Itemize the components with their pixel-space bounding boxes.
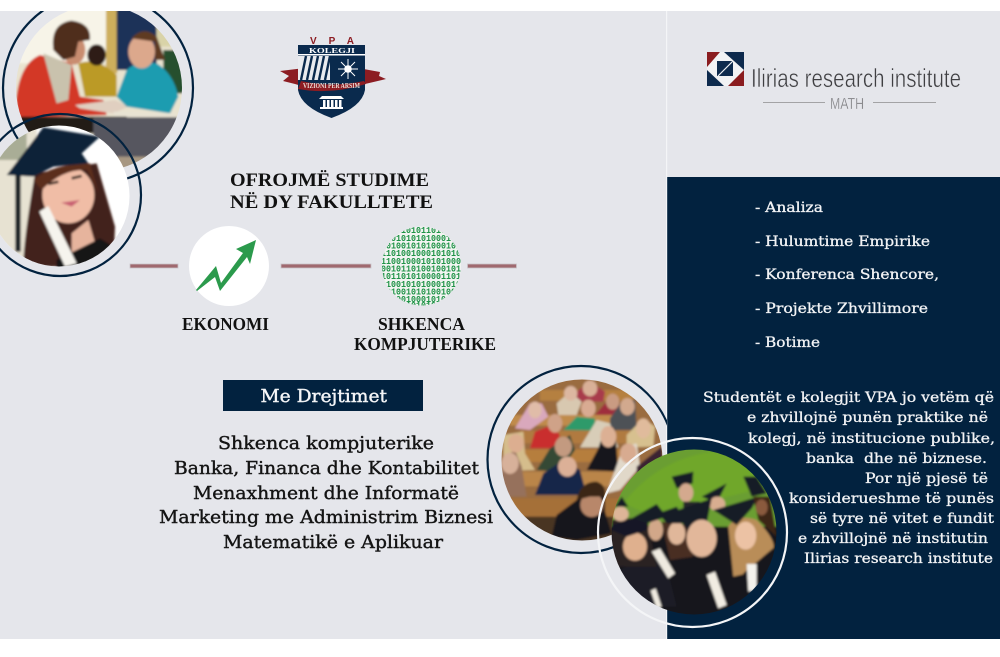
label: Ekonomi: EKONOMI	[182, 314, 269, 334]
title: NË DY FAKULLTETE	[230, 192, 433, 213]
icon: binary globe: 0010110100100101	[381, 264, 461, 274]
connector lines	[130, 264, 516, 268]
logo: Ilirias research institute	[707, 52, 961, 113]
title	[230, 170, 433, 213]
icon: binary globe: 1100101010001010	[381, 279, 461, 290]
paragraph about students: konsiderueshme të punës	[789, 491, 994, 507]
icon: binary globe	[381, 225, 461, 311]
photo: graduates group	[598, 438, 787, 627]
paragraph about students: kolegj, në institucione publike,	[748, 431, 995, 447]
photo: students at a table	[3, 0, 193, 183]
icon: binary globe: 0010010101001001	[381, 286, 461, 298]
list of study directions: Marketing me Administrim Biznesi	[159, 507, 493, 528]
list of activities: - Botime	[755, 335, 820, 351]
paragraph about students: e zhvillojnë në institutin	[798, 531, 988, 547]
label: Shkenca Kompjuterike: SHKENCA	[378, 314, 465, 334]
paragraph about students: Por një pjesë të	[865, 471, 988, 487]
icon: rising arrow	[189, 226, 269, 306]
logo: VPA Kolegji shield: V P A	[310, 36, 354, 47]
list of study directions: Shkenca kompjuterike	[218, 433, 434, 454]
paragraph about students: Studentët e kolegjit VPA jo vetëm që	[703, 390, 994, 406]
icon: binary globe: 1010010001010101	[381, 294, 461, 305]
label: Shkenca Kompjuterike	[354, 314, 496, 354]
list of study directions: Menaxhment dhe Informatë	[193, 483, 459, 504]
icon: diamond square mark	[707, 52, 744, 86]
logo: Ilirias research institute: MATH	[830, 96, 864, 113]
icon: binary globe: 0010010101000101	[381, 240, 461, 252]
paragraph about students	[703, 390, 995, 567]
list of activities: - Projekte Zhvillimore	[755, 301, 928, 317]
logo: VPA Kolegji shield: KOLEGJI	[309, 46, 355, 55]
list of study directions: Matematikë e Aplikuar	[223, 532, 443, 553]
photo: graduate woman	[0, 114, 141, 276]
list of activities: - Hulumtime Empirike	[755, 234, 930, 250]
list of activities: - Konferenca Shencore,	[755, 267, 939, 283]
list of study directions	[159, 433, 493, 553]
icon: binary globe: 1100100010101000	[381, 256, 461, 267]
heading: Me Drejtimet	[223, 380, 423, 411]
label: Shkenca Kompjuterike: KOMPJUTERIKE	[354, 334, 496, 354]
icon: binary globe: 0100010101000101	[381, 300, 461, 311]
icon: binary globe: 1101001000101010	[381, 248, 461, 259]
paragraph about students: së tyre në vitet e fundit	[810, 511, 995, 527]
icon: binary globe: 1001010101000101	[381, 233, 461, 244]
photo: lecture hall	[488, 366, 674, 553]
logo: VPA Kolegji shield	[280, 36, 386, 118]
paragraph about students: e zhvillojnë punën praktike në	[747, 410, 988, 426]
title: OFROJMË STUDIME	[230, 170, 429, 191]
list of activities	[755, 200, 939, 351]
right navy panel	[666, 11, 1000, 639]
list of study directions: Banka, Financa dhe Kontabilitet	[174, 458, 480, 479]
icon: binary globe: 1010101011010100	[381, 225, 461, 236]
list of activities: - Analiza	[755, 200, 823, 216]
heading: Me Drejtimet: Me Drejtimet	[260, 386, 388, 407]
paragraph about students: banka dhe në biznese.	[806, 451, 987, 467]
icon: binary globe: 1011010100001101	[381, 271, 461, 282]
logo: VPA Kolegji shield: VIZIONI PER ARSIM	[303, 82, 360, 90]
paragraph about students: Ilirias research institute	[804, 551, 993, 567]
